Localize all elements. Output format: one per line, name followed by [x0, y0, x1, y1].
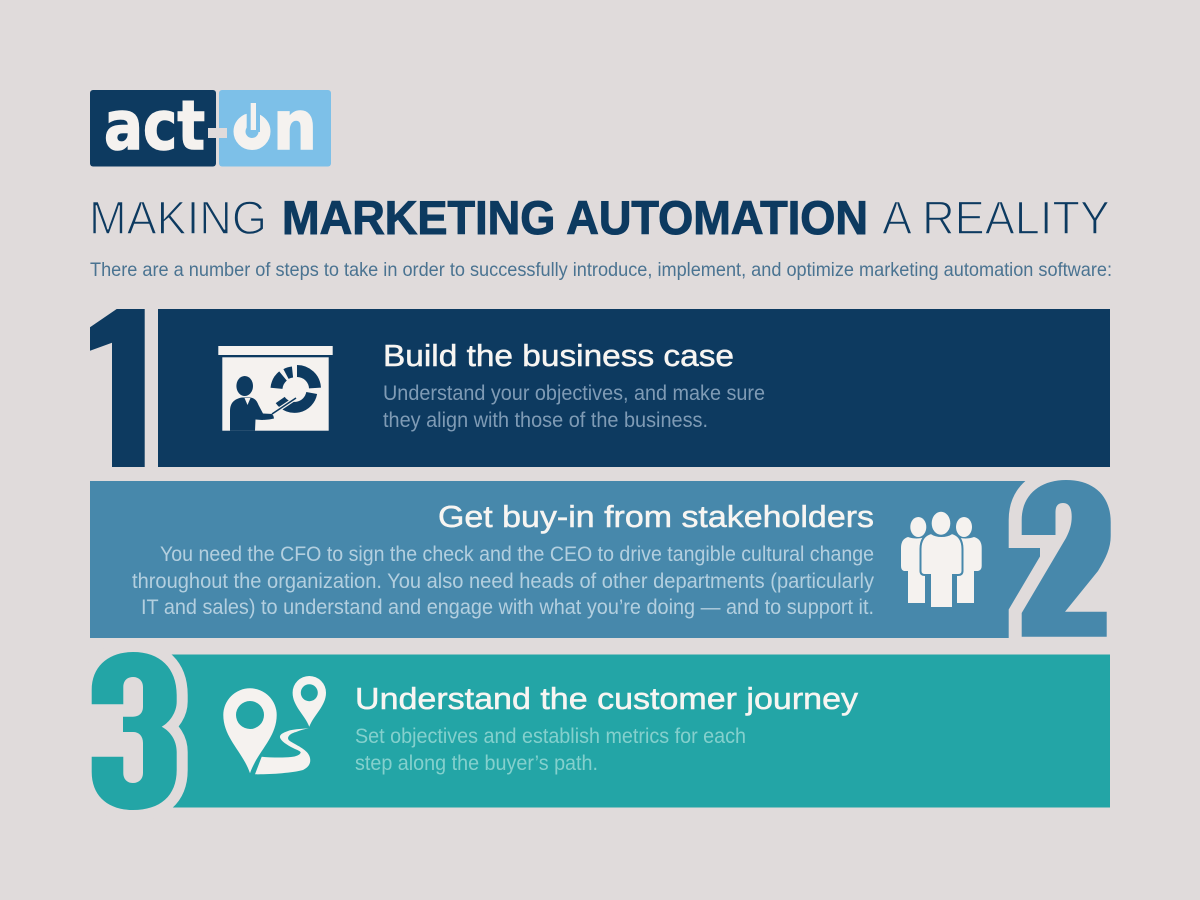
bar 1: [158, 309, 1110, 467]
description 3: step along the buyer’s path.: [355, 752, 598, 775]
panel: step 1: [90, 309, 1110, 468]
description 1: [383, 382, 765, 432]
description 3: [355, 725, 746, 775]
numeral 3: [92, 652, 177, 811]
title: MARKETING AUTOMATION: [282, 191, 868, 244]
subtitle: There are a number of steps to take in order to successfully introduce, implement, and optimize marketing automation software:: [90, 259, 1112, 281]
numeral 1: [90, 309, 145, 468]
heading 3: Understand the customer journey: [355, 681, 859, 716]
icon: presenter with chart: [218, 346, 333, 431]
description 2: [132, 543, 874, 619]
panel: step 2: [90, 480, 1111, 638]
bar 3: [170, 654, 1110, 808]
panel: step 3: [92, 652, 1110, 811]
logo: act-on: [90, 87, 331, 166]
description 2: You need the CFO to sign the check and the CEO to drive tangible cultural change: [160, 543, 874, 566]
icon: group of people: [901, 512, 982, 608]
numeral 2: [1022, 480, 1111, 638]
description 2: throughout the organization. You also need heads of other departments (particularly: [132, 570, 874, 593]
title: A REALITY: [882, 191, 1110, 244]
title: MAKING: [89, 191, 267, 244]
logo: act-on: n: [273, 87, 317, 166]
heading 2: Get buy-in from stakeholders: [438, 499, 874, 534]
heading 1: Build the business case: [383, 338, 734, 373]
description 3: Set objectives and establish metrics for each: [355, 725, 746, 748]
description 1: Understand your objectives, and make sure: [383, 382, 765, 405]
icon: map pins and road: [223, 676, 326, 774]
logo: act-on: act: [104, 87, 205, 166]
title: [89, 191, 1110, 244]
description 1: they align with those of the business.: [383, 409, 708, 432]
bar 2: [90, 481, 1040, 638]
description 2: IT and sales) to understand and engage with what you’re doing — and to support it.: [141, 596, 874, 619]
